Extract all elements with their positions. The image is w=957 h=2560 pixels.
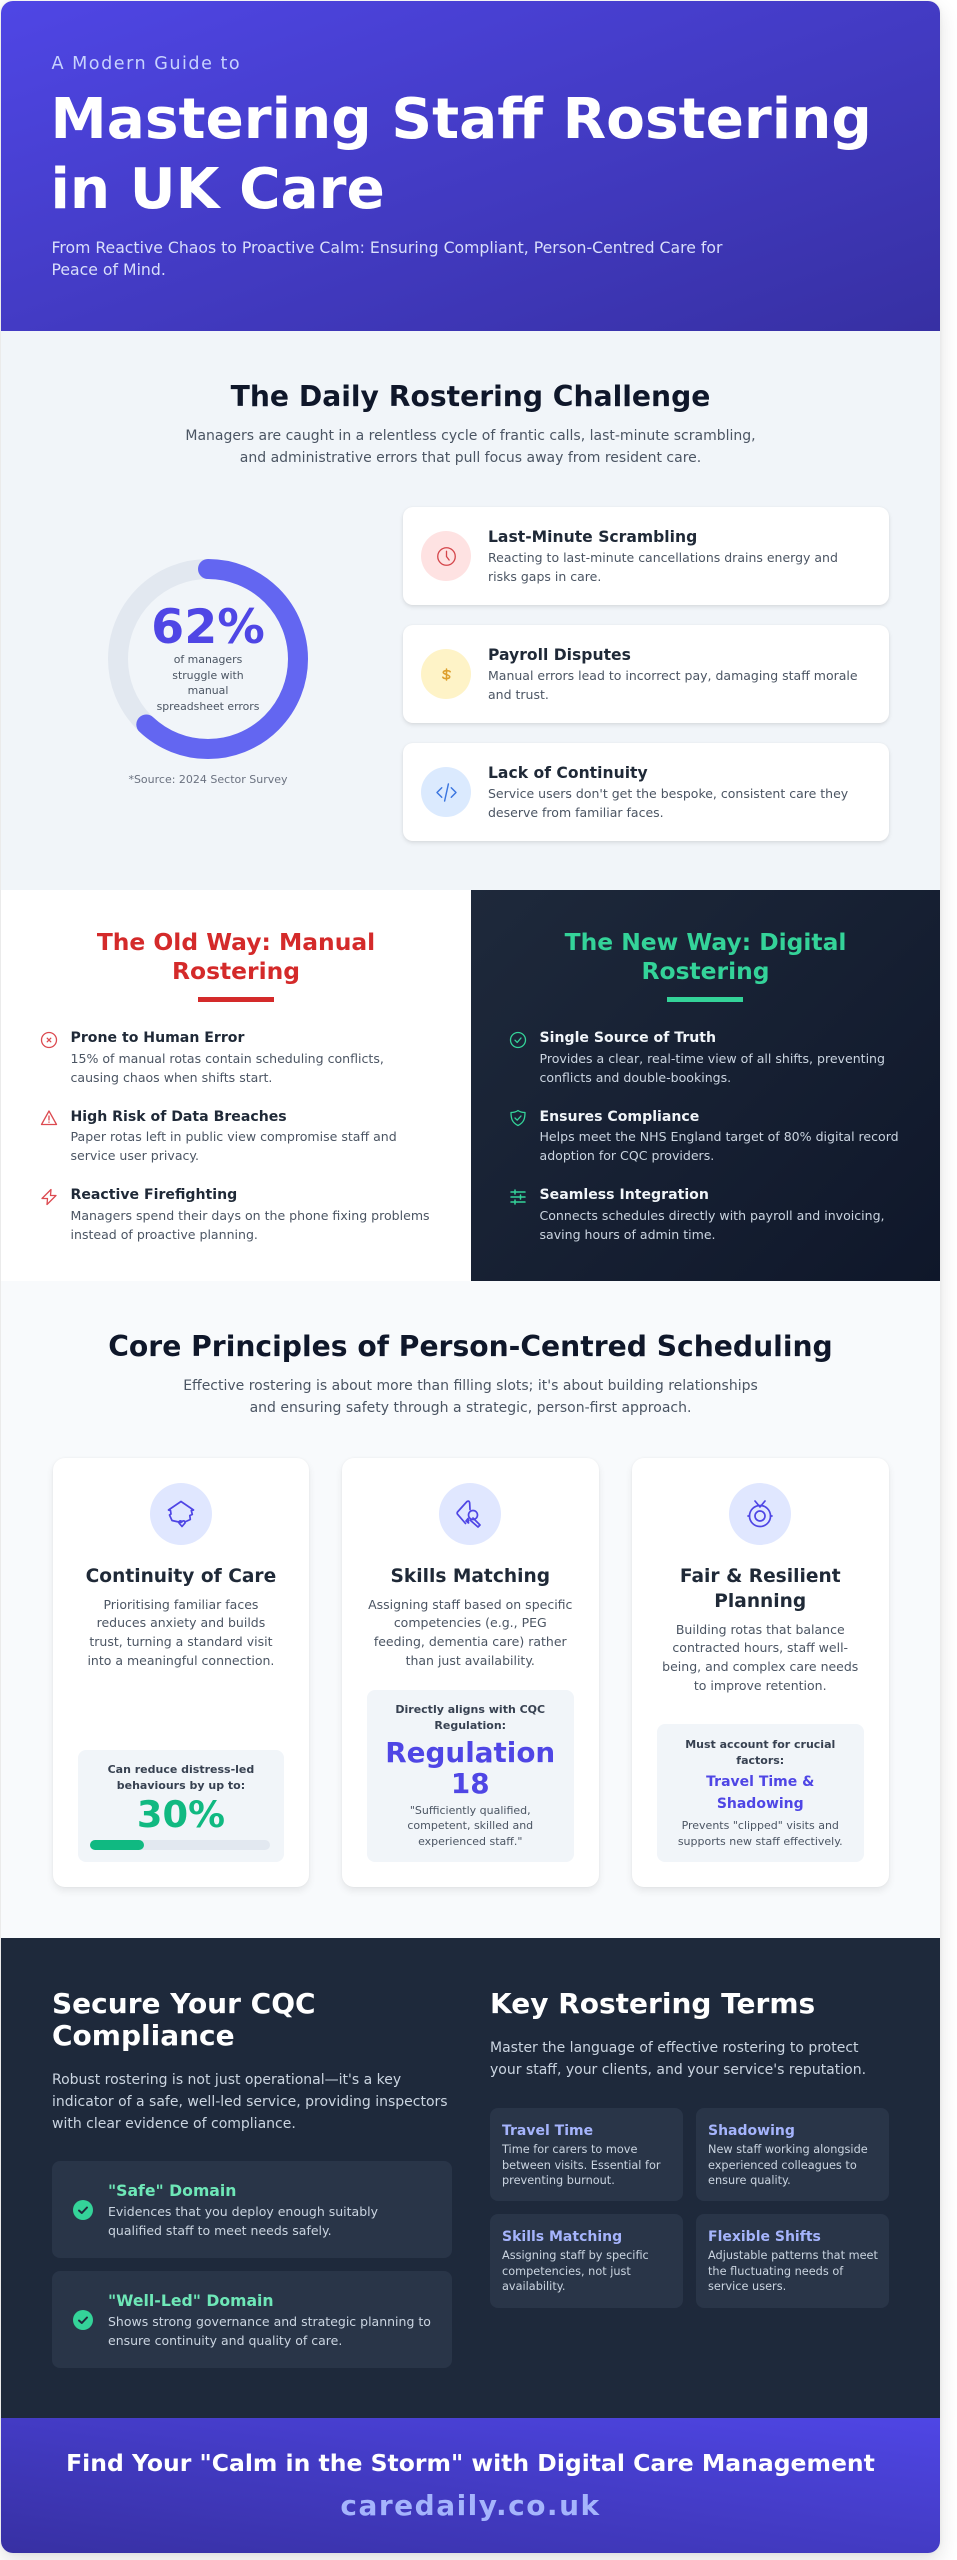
stat label: behaviours by up to:	[117, 1779, 245, 1792]
card text	[368, 1597, 572, 1668]
box note: Prevents "clipped" visits and	[682, 1819, 839, 1832]
donut caption: of managers	[174, 653, 242, 666]
card text: contracted hours, staff well-	[672, 1640, 848, 1655]
card text: into a meaningful connection.	[87, 1653, 274, 1668]
subtitle	[52, 238, 722, 279]
item: source of truth	[510, 1030, 885, 1084]
card: lack of continuity	[403, 743, 889, 841]
heading: Rostering	[172, 956, 300, 984]
terms intro: Master the language of effective rostering to protect	[490, 2040, 859, 2056]
terms intro	[490, 2038, 866, 2082]
term text: competencies, not just	[502, 2265, 631, 2278]
icon: check badge	[73, 2310, 93, 2330]
domain text: Evidences that you deploy enough suitably	[108, 2204, 378, 2218]
heading: terms: Key Rostering Terms	[490, 1987, 815, 2020]
panel: new way	[471, 890, 940, 1281]
card text	[87, 1597, 274, 1668]
card: skills matching	[342, 1458, 598, 1887]
term title: Travel Time	[502, 2123, 593, 2139]
card text: risks gaps in care.	[488, 568, 601, 584]
heading: compliance: Compliance	[52, 2018, 235, 2052]
card title: Last-Minute Scrambling	[488, 528, 697, 546]
heading: The Daily Rostering Challenge	[231, 380, 710, 413]
card: continuity of care	[53, 1458, 309, 1887]
card text: Service users don't get the bespoke, consistent care they	[488, 786, 848, 800]
domain text: ensure continuity and quality of care.	[108, 2332, 342, 2348]
item title: Prone to Human Error	[70, 1030, 244, 1046]
heading: compliance	[52, 1988, 316, 2051]
term title: Shadowing	[708, 2123, 795, 2139]
term: skills matching	[490, 2214, 683, 2308]
icon: hand with magnifier	[439, 1482, 501, 1544]
stat label: Can reduce distress-led	[108, 1763, 254, 1776]
donut chart: 62%	[108, 559, 308, 759]
card text	[488, 550, 838, 584]
intro text	[183, 1378, 758, 1416]
card text: Building rotas that balance	[676, 1622, 845, 1637]
term: shadowing	[696, 2108, 889, 2201]
donut value: 62%	[151, 600, 265, 655]
term text	[708, 2248, 878, 2295]
donut caption	[157, 653, 259, 713]
item text: Paper rotas left in public view compromise staff and	[70, 1129, 397, 1144]
card text	[488, 786, 848, 820]
card title: Fair & Resilient	[680, 1566, 841, 1586]
domain text: Shows strong governance and strategic planning to	[108, 2314, 431, 2328]
panel: core principles	[1, 1281, 940, 1938]
box value: Shadowing	[717, 1796, 804, 1812]
icon: bolt	[41, 1188, 57, 1206]
card text: than just availability.	[406, 1653, 535, 1668]
item text: adoption for CQC providers.	[540, 1148, 714, 1163]
domain: well-led	[52, 2271, 452, 2368]
stat box: 30%	[78, 1750, 284, 1862]
item title: Reactive Firefighting	[70, 1187, 237, 1203]
box quote: competent, skilled and	[407, 1819, 533, 1832]
accent bar	[198, 997, 274, 1002]
item text	[540, 1208, 885, 1242]
domain text	[108, 2202, 378, 2240]
item text: saving hours of admin time.	[540, 1226, 716, 1242]
term text: preventing burnout.	[502, 2174, 615, 2187]
factor box	[657, 1724, 864, 1862]
box label	[685, 1738, 835, 1767]
terms intro: your staff, your clients, and your service's reputation.	[490, 2062, 866, 2078]
domain: safe	[52, 2161, 452, 2258]
intro text	[185, 428, 756, 466]
icon: shield check	[510, 1110, 526, 1126]
item text: instead of proactive planning.	[70, 1226, 258, 1242]
icon: code	[421, 767, 471, 817]
item text: 15% of manual rotas contain scheduling conflicts,	[70, 1050, 384, 1066]
box note: supports new staff effectively.	[678, 1835, 843, 1848]
box note	[657, 1818, 864, 1849]
heading: The New Way: Digital	[565, 928, 846, 956]
panel: daily rostering challenge	[1, 331, 940, 890]
domain title: "Safe" Domain	[108, 2181, 236, 2200]
item: integration	[510, 1187, 885, 1242]
card text: Reacting to last-minute cancellations drains energy and	[488, 550, 838, 564]
stat value: 30%	[137, 1793, 225, 1836]
stat label	[108, 1763, 254, 1792]
item text: Connects schedules directly with payroll and invoicing,	[540, 1208, 885, 1222]
item text	[540, 1129, 899, 1163]
box value	[706, 1774, 814, 1812]
item text: causing chaos when shifts start.	[70, 1070, 272, 1084]
icon: dollar	[421, 649, 471, 699]
item text: service user privacy.	[70, 1148, 199, 1163]
box value: 18	[451, 1766, 490, 1800]
card text	[662, 1622, 858, 1693]
card: last-minute scrambling	[403, 507, 889, 605]
term text	[502, 2142, 661, 2189]
card text: being, and complex care needs	[662, 1659, 858, 1674]
box label: Regulation:	[434, 1719, 506, 1732]
heading	[97, 928, 375, 984]
heading: compliance: Secure Your CQC	[52, 1987, 316, 2020]
source note: *Source: 2024 Sector Survey	[128, 773, 288, 786]
footer headline: Find Your "Calm in the Storm" with Digital Care Management	[66, 2449, 875, 2477]
box label: Directly aligns with CQC	[395, 1703, 545, 1716]
item text	[540, 1050, 885, 1084]
card text: feeding, dementia care) rather	[374, 1634, 567, 1649]
heading	[564, 928, 846, 984]
heading: The Old Way: Manual	[97, 928, 375, 956]
term text: Time for carers to move	[502, 2143, 637, 2156]
box quote: "Sufficiently qualified,	[410, 1804, 531, 1817]
intro text: and administrative errors that pull focus away from resident care.	[240, 450, 701, 466]
box label: Must account for crucial	[685, 1738, 835, 1751]
panel: old way	[1, 890, 471, 1281]
domain text	[108, 2312, 431, 2350]
donut ring	[108, 559, 308, 759]
icon: target	[729, 1482, 791, 1544]
donut caption: struggle with	[172, 669, 244, 682]
card title: Planning	[714, 1591, 806, 1612]
item title: High Risk of Data Breaches	[70, 1108, 287, 1124]
icon: warning triangle	[40, 1110, 58, 1126]
term text	[502, 2248, 649, 2295]
compliance intro: Robust rostering is not just operational—it's a key	[52, 2072, 401, 2088]
accent bar	[667, 997, 743, 1002]
domain title: "Well-Led" Domain	[108, 2291, 274, 2310]
box quote: experienced staff."	[418, 1835, 522, 1848]
panel: compliance and terms	[1, 1938, 940, 2418]
icon: house with heart	[150, 1482, 212, 1544]
term title: Skills Matching	[502, 2229, 622, 2245]
box value	[385, 1736, 555, 1800]
item title: Seamless Integration	[540, 1187, 709, 1203]
item: human error	[40, 1030, 384, 1084]
term text: Adjustable patterns that meet	[708, 2249, 878, 2262]
term text: Assigning staff by specific	[502, 2249, 649, 2262]
compliance intro: indicator of a safe, well-led service, providing inspectors	[52, 2094, 448, 2110]
item text: conflicts and double-bookings.	[540, 1070, 731, 1084]
icon: clock	[421, 531, 471, 581]
item text: Provides a clear, real-time view of all shifts, preventing	[540, 1050, 885, 1066]
card: fair and resilient planning	[632, 1458, 888, 1887]
term text: availability.	[502, 2280, 565, 2293]
term title: Flexible Shifts	[708, 2229, 821, 2245]
progress bar	[90, 1840, 270, 1850]
item title: Ensures Compliance	[540, 1108, 699, 1124]
card text	[488, 668, 858, 702]
footer link text: caredaily.co.uk	[340, 2489, 601, 2522]
title: Mastering Staff Rostering	[50, 87, 872, 152]
icon: sliders	[510, 1189, 526, 1205]
heading: Rostering	[642, 956, 770, 984]
title	[50, 87, 872, 222]
card text: deserve from familiar faces.	[488, 804, 664, 820]
card text: trust, turning a standard visit	[89, 1634, 272, 1649]
card title: Lack of Continuity	[488, 764, 648, 782]
term text: service users.	[708, 2280, 786, 2293]
donut caption: spreadsheet errors	[157, 700, 259, 713]
compliance intro	[52, 2070, 448, 2135]
card title: Continuity of Care	[86, 1566, 276, 1586]
title: in UK Care	[50, 157, 385, 222]
intro text: Managers are caught in a relentless cycle of frantic calls, last-minute scrambling,	[185, 428, 756, 444]
term text: experienced colleagues to	[708, 2159, 857, 2172]
heading: Core Principles of Person-Centred Scheduling	[108, 1330, 833, 1363]
card text: to improve retention.	[694, 1678, 827, 1693]
card title: Payroll Disputes	[488, 646, 631, 664]
term text: between visits. Essential for	[502, 2159, 661, 2172]
card text: competencies (e.g., PEG	[394, 1615, 547, 1630]
card text: Assigning staff based on specific	[368, 1597, 572, 1612]
item: data breaches	[40, 1108, 397, 1163]
box value: Travel Time &	[706, 1774, 814, 1790]
term text: the fluctuating needs of	[708, 2265, 843, 2278]
item: firefighting	[41, 1187, 430, 1242]
subtitle: From Reactive Chaos to Proactive Calm: Ensuring Compliant, Person-Centred Care for	[52, 238, 722, 257]
card text: and trust.	[488, 686, 549, 702]
stat box: regulation 18	[367, 1690, 574, 1862]
panel: footer call to action	[1, 2418, 940, 2553]
item: compliance	[510, 1108, 899, 1163]
domain text: qualified staff to meet needs safely.	[108, 2222, 332, 2238]
item text	[70, 1129, 397, 1163]
term text: ensure quality.	[708, 2174, 791, 2187]
box label: factors:	[736, 1754, 784, 1767]
card title	[680, 1566, 841, 1612]
box quote	[407, 1804, 533, 1848]
item text: Managers spend their days on the phone fixing problems	[70, 1208, 430, 1222]
eyebrow: A Modern Guide to	[52, 54, 241, 74]
card text: Prioritising familiar faces	[103, 1597, 258, 1612]
intro text: Effective rostering is about more than filling slots; it's about building relationships	[183, 1378, 758, 1394]
item title: Single Source of Truth	[540, 1030, 716, 1046]
term text	[708, 2142, 868, 2189]
card text: reduces anxiety and builds	[97, 1615, 265, 1630]
subtitle: Peace of Mind.	[52, 260, 166, 279]
donut caption: manual	[188, 684, 228, 697]
card text: Manual errors lead to incorrect pay, damaging staff morale	[488, 668, 858, 682]
icon: x circle	[40, 1032, 58, 1048]
item text: Helps meet the NHS England target of 80% digital record	[540, 1129, 899, 1144]
card: payroll disputes	[403, 625, 889, 723]
item text	[70, 1050, 384, 1084]
compliance intro: with clear evidence of compliance.	[52, 2116, 296, 2132]
term: travel time	[490, 2108, 683, 2201]
icon: check badge	[73, 2200, 93, 2220]
term: flexible shifts	[696, 2214, 889, 2308]
panel: hero header	[1, 1, 940, 331]
box value: Regulation	[385, 1736, 555, 1768]
item text	[70, 1208, 430, 1242]
card title: Skills Matching	[390, 1566, 550, 1586]
box label	[395, 1703, 545, 1732]
intro text: and ensuring safety through a strategic, person-first approach.	[250, 1400, 691, 1416]
term text: New staff working alongside	[708, 2143, 868, 2156]
icon: check circle	[510, 1032, 526, 1048]
